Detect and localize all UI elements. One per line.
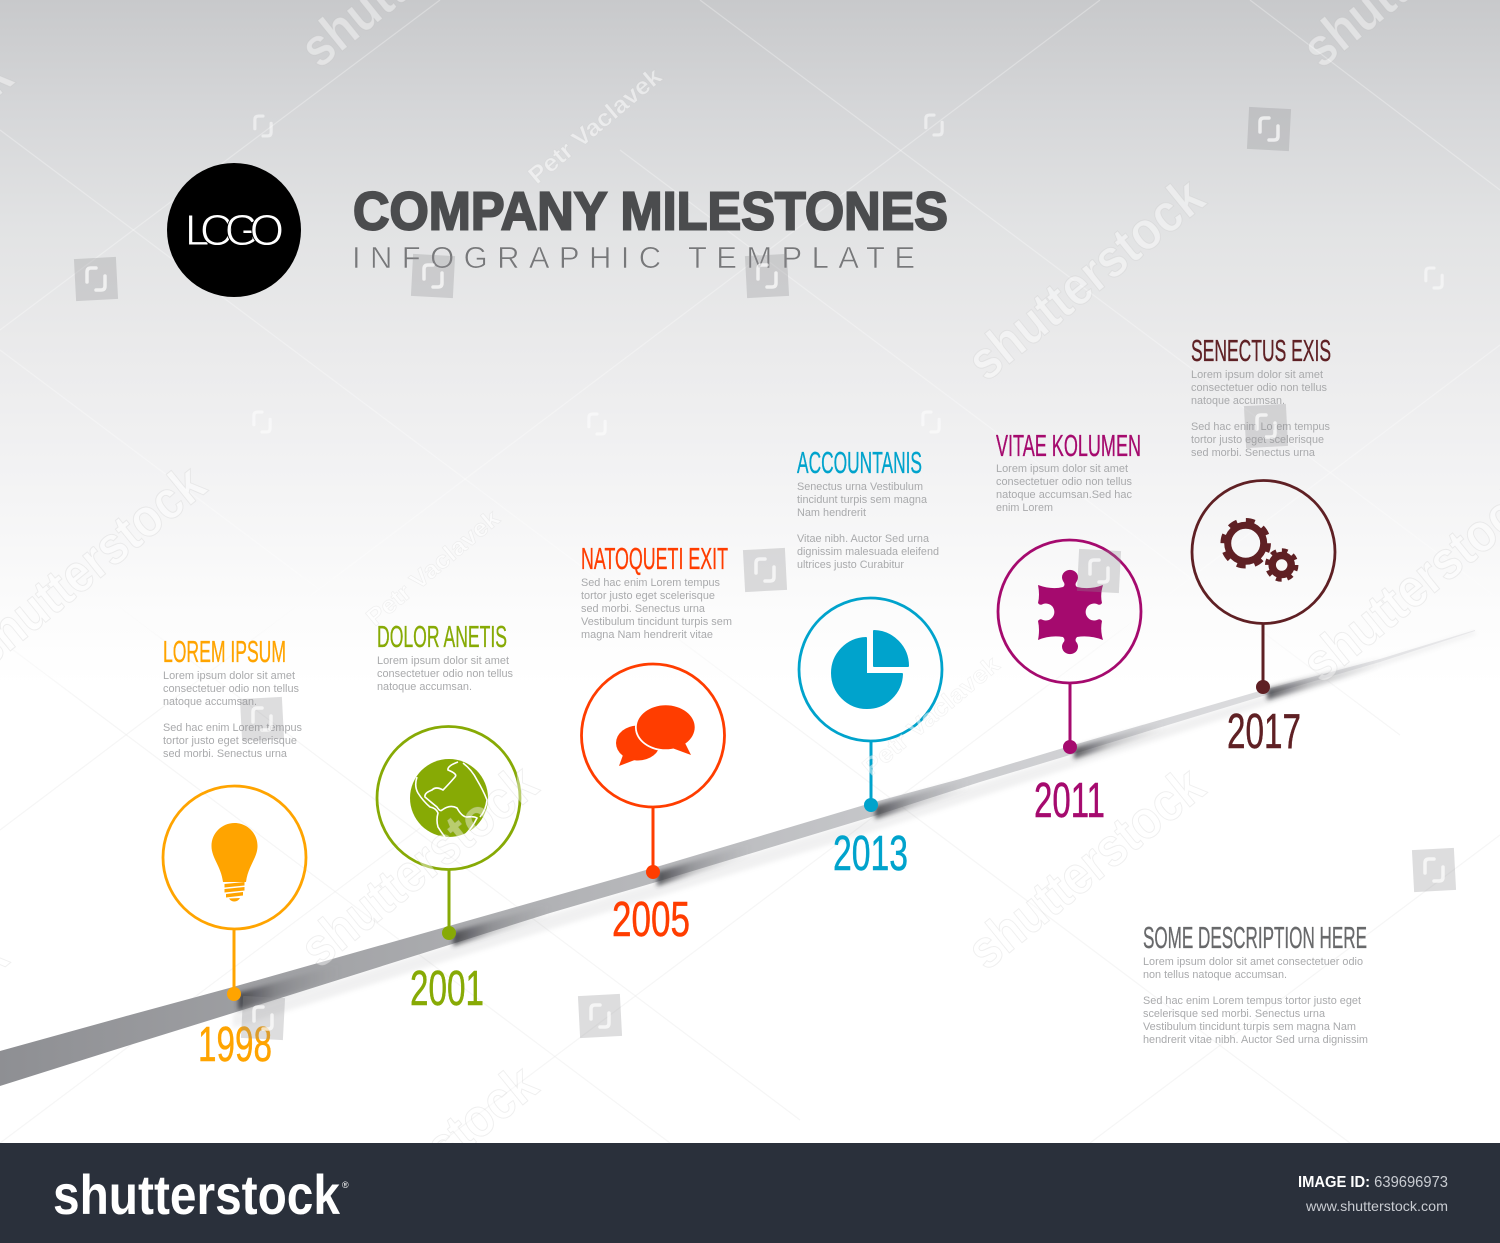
side description [1143,920,1368,1046]
description [1191,369,1330,459]
timeline road [0,630,1475,1086]
description: natoque accumsan. [1191,395,1285,407]
description [163,670,302,760]
year: 2013 [833,827,908,881]
milestone 1998 [163,634,306,1072]
year: 2011 [1034,774,1105,828]
logo badge [167,163,301,297]
description [581,577,732,641]
heading: VITAE KOLUMEN [996,428,1141,463]
heading: NATOQUETI EXIT [581,541,728,576]
body text: Sed hac enim Lorem tempus tortor justo eget [1143,995,1361,1007]
description: tincidunt turpis sem magna [797,494,928,506]
milestone 2017 [1191,333,1335,759]
marker ring, stem and dot [998,540,1141,754]
description [797,481,939,571]
watermark text: Petr Vaclavek [523,62,668,190]
description: Lorem ipsum dolor sit amet [1191,369,1323,381]
description: magna Nam hendrerit vitae [581,629,713,641]
year: 2001 [410,962,484,1016]
icon: pie chart [832,631,908,708]
heading: DOLOR ANETIS [377,619,507,654]
image id: IMAGE ID: 639696973 [1298,1174,1448,1191]
description: tortor justo eget scelerisque [581,590,715,602]
watermark text: shutterstock [956,754,1216,981]
heading: LOREM IPSUM [163,634,286,669]
description: tortor justo eget scelerisque [1191,434,1324,446]
description: Vitae nibh. Auctor Sed urna [797,533,930,545]
description: tortor justo eget scelerisque [163,735,297,747]
watermark text: shutterstock [289,752,549,979]
description: sed morbi. Senectus urna [1191,447,1316,459]
title: INFOGRAPHIC TEMPLATE [352,240,915,275]
description: consectetuer odio non tellus [996,476,1132,488]
website: www.shutterstock.com [1305,1198,1448,1214]
marker ring, stem and dot [163,786,306,1001]
description: Sed hac enim Lorem tempus [1191,421,1330,433]
description: Sed hac enim Lorem tempus [163,722,302,734]
description: sed morbi. Senectus urna [163,748,288,760]
icon: puzzle piece [1038,570,1103,654]
title: COMPANY MILESTONES [353,182,948,242]
description: natoque accumsan. [377,681,472,693]
marker ring, stem and dot [582,664,724,879]
road shadow underlay [233,631,1475,1028]
body text: Lorem ipsum dolor sit amet consectetuer odio [1143,956,1363,968]
description: ultrices justo Curabitur [797,559,904,571]
icon: speech bubbles [616,705,695,766]
logo badge: LOGO [185,206,284,255]
year: 2017 [1227,705,1301,759]
body text: Vestibulum tincidunt turpis sem magna Nam [1143,1021,1356,1033]
description [377,655,513,693]
milestone 2011 [996,428,1141,828]
milestone 2005 [581,541,732,947]
body text: hendrerit vitae nibh. Auctor Sed urna dignissim [1143,1034,1368,1046]
heading: ACCOUNTANIS [797,445,922,480]
year: 1998 [198,1018,272,1072]
description [996,463,1132,514]
description: sed morbi. Senectus urna [581,603,706,615]
marker ring, stem and dot [799,598,942,812]
footer bar: ® [342,1180,349,1190]
footer bar [0,1143,1500,1243]
icon: light bulb [212,823,258,902]
body text: non tellus natoque accumsan. [1143,969,1287,981]
description: Lorem ipsum dolor sit amet [377,655,509,667]
icon: gears [1223,521,1296,580]
marker ring, stem and dot [1192,480,1335,694]
watermark badges [74,107,1456,1040]
description: Vestibulum tincidunt turpis sem [581,616,732,628]
marker ring, stem and dot [377,726,520,940]
description: Lorem ipsum dolor sit amet [996,463,1128,475]
watermark text: Petr Vaclavek [361,504,506,632]
icon: globe [410,759,488,837]
road shadows behind markers [238,658,1380,1010]
description: dignissim malesuada eleifend [797,546,939,558]
body text: scelerisque sed morbi. Senectus urna [1143,1008,1326,1020]
footer brand: shutterstock [53,1163,341,1226]
milestone 2001 [377,619,520,1016]
body text [1143,956,1368,1046]
year: 2005 [612,893,690,947]
watermark text: Petr Vaclavek [857,651,1006,781]
description: Senectus urna Vestibulum [797,481,923,493]
description: natoque accumsan.Sed hac [996,489,1132,501]
description: consectetuer odio non tellus [1191,382,1327,394]
description: Lorem ipsum dolor sit amet [163,670,295,682]
description: enim Lorem [996,502,1053,514]
description: Sed hac enim Lorem tempus [581,577,720,589]
title [352,182,948,275]
description: natoque accumsan. [163,696,257,708]
watermark text: shutterstock [956,165,1216,392]
heading: SENECTUS EXIS [1191,333,1331,368]
description: consectetuer odio non tellus [377,668,513,680]
description: Nam hendrerit [797,507,866,519]
milestone 2013 [797,445,942,881]
description: consectetuer odio non tellus [163,683,299,695]
